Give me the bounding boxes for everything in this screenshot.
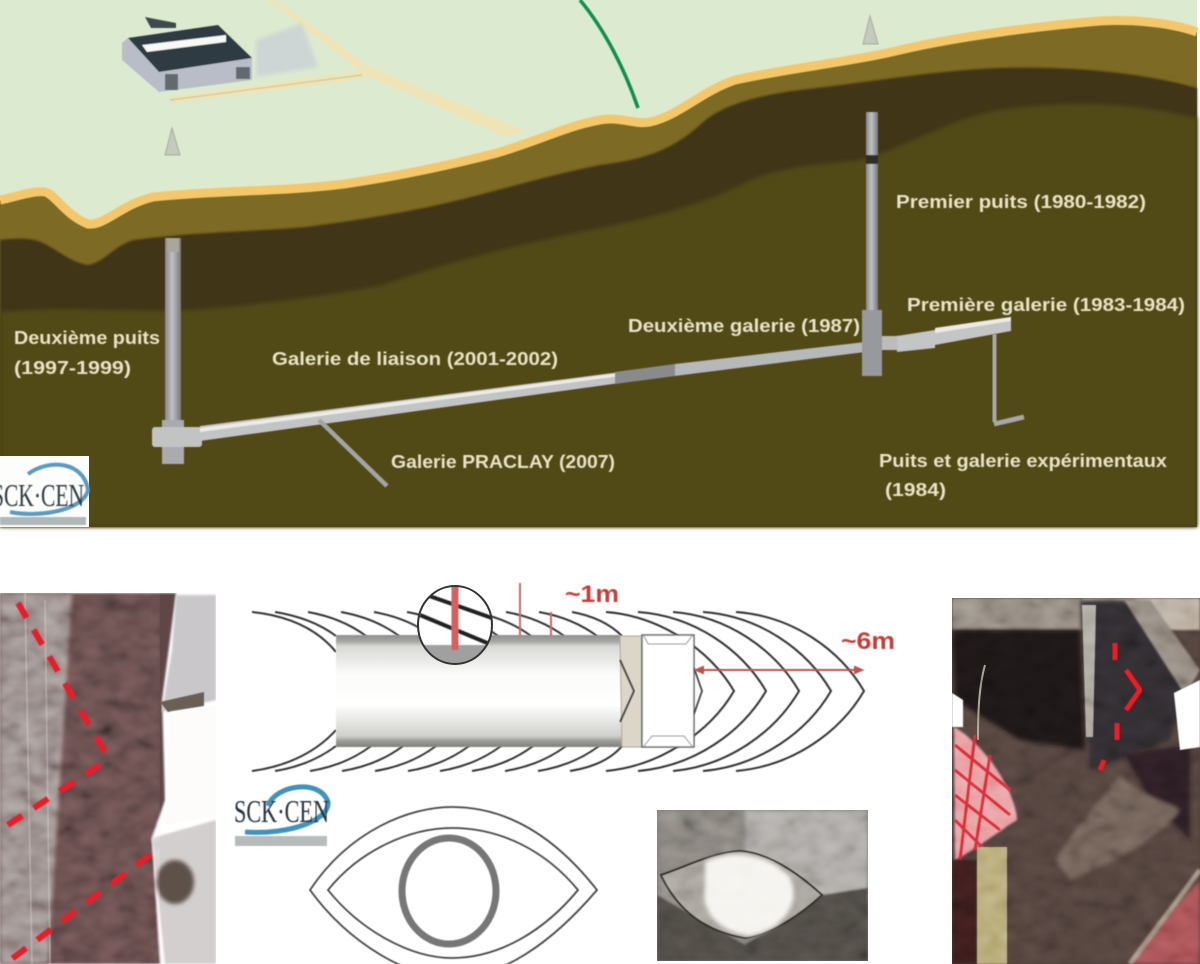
white wall panel bottom [152, 820, 216, 964]
panel: photo left of gallery wall [0, 593, 216, 964]
red net [954, 727, 1017, 860]
left dark strip [952, 860, 977, 964]
tunnel face [642, 635, 702, 747]
red fracture markers [1100, 643, 1140, 770]
icon: surface marker left [165, 128, 180, 155]
white wall panel top [162, 595, 216, 712]
white wall panel middle [164, 706, 199, 802]
fracture hatching [252, 612, 864, 771]
PRACLAY gallery [319, 420, 387, 486]
bracket [160, 692, 204, 712]
logo: SCK-CEN lower [234, 787, 329, 846]
layer: dark clay band [0, 68, 1197, 527]
label: Puits et galerie expérimentaux: Puits et galerie expérimentaux [879, 451, 1167, 471]
label: Deuxième puits: Deuxième puits [14, 328, 160, 348]
label: Deuxième galerie: Deuxième galerie (1987) [628, 316, 860, 336]
metal bar [1082, 605, 1096, 737]
tunnel end ring [620, 636, 642, 747]
layer: olive sand band [0, 21, 1197, 527]
diagram: excavation fracture zone [252, 581, 917, 771]
photo: centre fracture [657, 810, 868, 961]
parking area [256, 23, 318, 77]
icon: surface marker right [863, 16, 878, 44]
lower rock mound [1055, 775, 1180, 880]
panel: geological cross-section [0, 0, 1197, 527]
red corner [1130, 880, 1200, 964]
second shaft [152, 238, 202, 464]
photo grain [657, 810, 868, 961]
hanging cable [978, 665, 985, 740]
white opening right [1174, 680, 1200, 750]
icon: surface building [122, 17, 252, 92]
river [580, 0, 638, 108]
ring chevron [620, 660, 634, 722]
logo: SCK-CEN top [0, 456, 89, 527]
logo: SCK-CEN lower: SCK·CEN [234, 793, 329, 829]
white notch left [952, 693, 963, 727]
1m dimension marks [520, 583, 551, 636]
wooden post [977, 847, 1007, 964]
label: Galerie PRACLAY: Galerie PRACLAY (2007) [391, 452, 615, 472]
label: experimental dates: (1984) [885, 480, 946, 500]
surface: green terrain [0, 0, 1197, 527]
connecting gallery [200, 342, 865, 441]
tunnel tube [336, 635, 622, 747]
red fracture lines [0, 603, 150, 964]
photo grain [952, 598, 1200, 964]
inset lens [418, 585, 492, 665]
dark recess right [1124, 745, 1190, 840]
layer: yellow surface edge [0, 21, 1197, 224]
centre line [272, 690, 917, 692]
label: Galerie de liaison: Galerie de liaison (2001-2002) [272, 349, 558, 369]
first gallery [897, 317, 1011, 352]
photo grain [0, 593, 160, 964]
label: Deuxième puits dates: (1997-1999) [14, 358, 131, 378]
layer: lower clay ground [0, 104, 1197, 527]
label: ~1m: ~1m [565, 581, 619, 608]
first shaft [862, 112, 898, 376]
photo: right gallery face [952, 598, 1200, 964]
label: Premier puits: Premier puits (1980-1982) [896, 192, 1146, 212]
road network [168, 0, 524, 137]
6m dimension arrow [696, 667, 862, 673]
label: ~6m: ~6m [841, 628, 895, 655]
experimental shaft and gallery [994, 334, 1024, 424]
diagram: cross-section eye [310, 807, 597, 964]
label: Première galerie: Première galerie (1983-1984) [907, 295, 1185, 315]
